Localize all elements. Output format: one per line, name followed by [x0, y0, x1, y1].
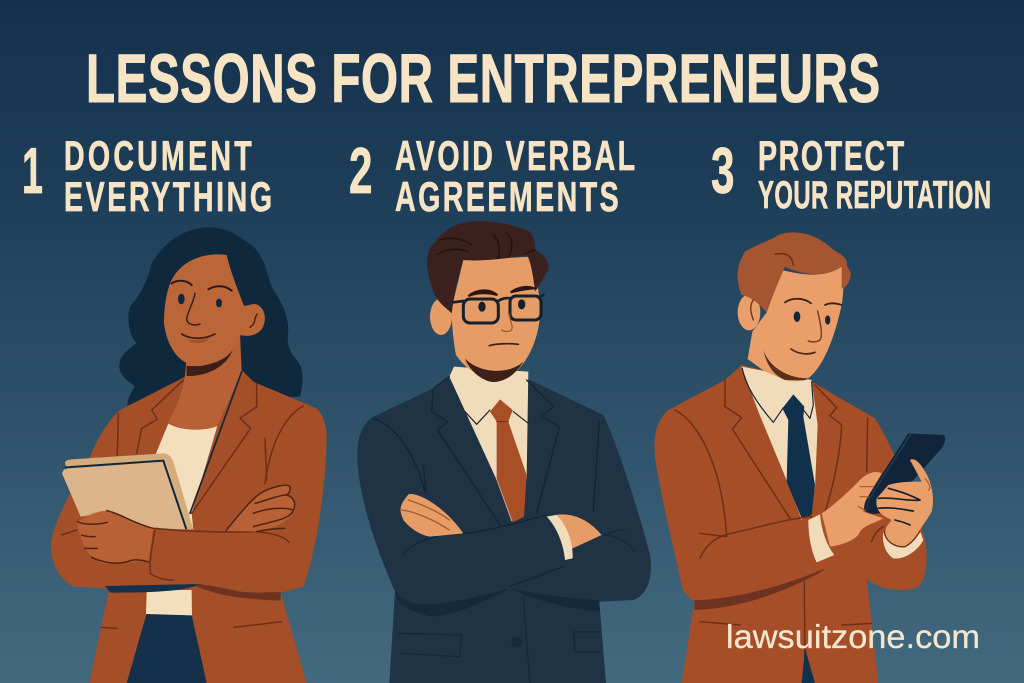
- blazer: [51, 370, 327, 683]
- pointing hand: [822, 472, 883, 547]
- shirt cuffs: [808, 514, 923, 562]
- lesson 3 heading: 3: [711, 134, 734, 207]
- lesson 3 heading: [711, 131, 991, 216]
- suit: [357, 375, 651, 683]
- title: LESSONS FOR ENTREPRENEURS: [86, 39, 880, 117]
- blazer seams: [62, 380, 303, 628]
- trousers: [127, 613, 207, 683]
- shirt: [742, 367, 818, 520]
- neck: [168, 333, 242, 430]
- person 1: woman with tablet: [51, 227, 327, 683]
- right hand: [227, 485, 295, 532]
- ear: [738, 294, 760, 330]
- collar lines: [465, 410, 528, 424]
- smartphone: [863, 433, 945, 514]
- facial features: [172, 281, 257, 343]
- left hand: [77, 511, 153, 564]
- hair: [427, 221, 549, 313]
- hair: [119, 227, 303, 405]
- lesson 2 heading: AGREEMENTS: [395, 172, 619, 220]
- lesson 3 heading: YOUR REPUTATION: [758, 173, 991, 216]
- facial features: [785, 299, 842, 354]
- chin shadow: [187, 350, 233, 376]
- lesson 3 heading: PROTECT: [758, 131, 904, 179]
- tie: [782, 394, 815, 518]
- lesson 2 heading: AVOID VERBAL: [395, 131, 635, 179]
- trouser wedge: [802, 648, 815, 683]
- face: [748, 267, 844, 381]
- waist band and sleeve shadow: [105, 584, 200, 593]
- jacket seams: [675, 380, 883, 683]
- lesson 1 heading: 1: [22, 136, 43, 208]
- chin shadow: [763, 350, 808, 380]
- hair: [738, 232, 851, 312]
- lesson 1 heading: EVERYTHING: [64, 172, 272, 220]
- sleeve shadow: [694, 568, 825, 610]
- phone hand: [876, 459, 933, 547]
- left hand: [401, 494, 463, 537]
- forearm: [401, 515, 565, 602]
- ear: [430, 298, 452, 335]
- glasses: [453, 295, 543, 323]
- lesson 1 heading: DOCUMENT: [64, 131, 252, 179]
- facial features: [468, 287, 534, 346]
- chin shadow: [465, 358, 523, 382]
- forearm sleeve: [150, 510, 307, 593]
- lapels: [373, 377, 599, 525]
- shirt: [449, 367, 528, 522]
- suit seams and pockets: [400, 530, 635, 683]
- person 2: man with glasses and crossed arms: [357, 221, 651, 683]
- tablet: [62, 453, 193, 529]
- button: [511, 637, 522, 648]
- lesson 2 heading: [349, 131, 635, 220]
- website label: lawsuitzone.com: [726, 618, 980, 655]
- jacket: [654, 365, 927, 683]
- right hand and cuff: [547, 514, 602, 560]
- arm shadow: [395, 588, 599, 617]
- lesson 1 heading: [22, 131, 272, 220]
- face: [164, 254, 265, 366]
- shirt: [153, 423, 217, 530]
- tie: [490, 399, 527, 522]
- lesson 2 heading: 2: [349, 134, 372, 207]
- face: [452, 257, 540, 377]
- collar lines: [742, 368, 813, 422]
- person 3: man with smartphone: [654, 232, 945, 683]
